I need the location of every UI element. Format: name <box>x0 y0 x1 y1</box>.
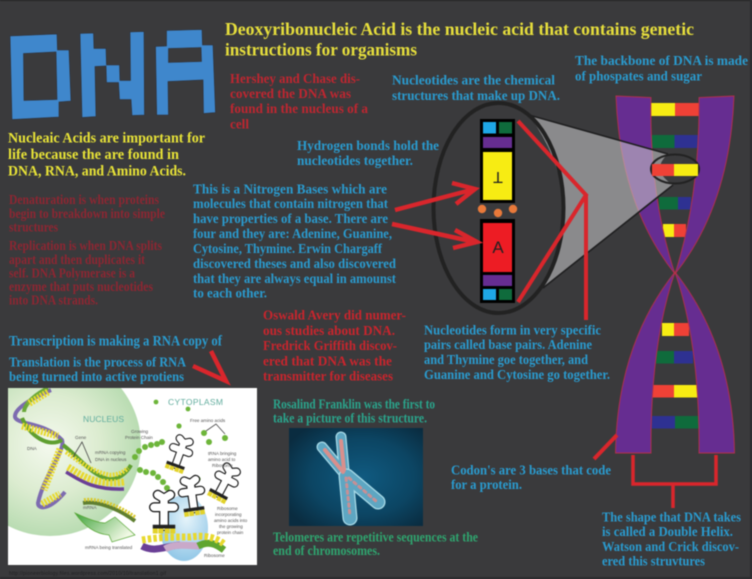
translation diagram picture <box>7 387 258 566</box>
diagram small labels: mRNA being translated <box>85 545 133 550</box>
diagram small labels: Free amino acids <box>190 418 226 423</box>
nucleotide A <box>480 219 515 303</box>
text: denaturation: Denaturation is when proteins <box>9 192 159 207</box>
text: nucleic acids importance <box>8 130 205 180</box>
text: Avery and Griffith <box>263 308 406 384</box>
text: backbone: of phospates and sugar <box>575 68 702 84</box>
text: translation <box>9 354 186 384</box>
text: codons: for a protein. <box>451 477 522 492</box>
diagram small labels: DNA in nucleus <box>95 457 127 462</box>
text: codons: Codon's are 3 bases that code <box>451 462 611 478</box>
text: telomeres: Telomeres are repetitive sequences at the <box>273 530 478 544</box>
text: codons <box>451 462 611 492</box>
text: Hershey and Chase: covered the DNA was <box>230 86 351 101</box>
diagram small labels: mRNA <box>83 505 97 510</box>
base pair rungs <box>650 103 700 428</box>
nucleotide T <box>480 119 515 203</box>
text: nitrogen bases: Cytosine, Thymine. Erwin Chargaff <box>193 241 382 256</box>
text: translation: being turned into active protiens <box>9 369 184 384</box>
text: replication: into DNA strands. <box>9 292 98 308</box>
text: base pairs: pairs called base pairs. Adenine <box>424 337 592 352</box>
text: replication: Replication is when DNA splits <box>9 238 162 253</box>
text: replication: enzyme that puts nucleotides <box>9 279 153 294</box>
ribosome <box>160 495 208 561</box>
text: replication: apart and then duplicates it <box>9 252 145 267</box>
text: translation: Translation is the process of RNA <box>9 354 186 370</box>
text: transcription: Transcription is making a RNA copy of <box>9 334 223 350</box>
text: nucleotides definition: Nucleotides are the chemical <box>392 72 555 88</box>
text: Hershey and Chase <box>230 71 368 132</box>
text: replication <box>9 238 162 308</box>
DNA ribbon <box>15 388 135 521</box>
text: Avery and Griffith: ous studies about DNA. <box>263 323 395 338</box>
arrow: transcription to picture <box>193 351 226 381</box>
sugar-phosphate backbone strands <box>616 96 734 453</box>
text: hydrogen bonds <box>297 138 439 168</box>
diagram small labels: Gene <box>75 435 87 440</box>
text: double helix <box>602 510 741 568</box>
tRNA molecules <box>165 437 194 474</box>
text: telomeres <box>273 530 478 558</box>
text: nucleotides definition <box>392 72 560 103</box>
diagram small labels: Protein Chain <box>125 435 153 440</box>
text: Rosalind Franklin: Rosalind Franklin was the first to <box>273 396 435 412</box>
nucleus <box>8 388 142 536</box>
text: nucleic acids importance: Nucleaic Acids are important for <box>8 130 205 146</box>
translation arrow <box>75 513 135 542</box>
text: nitrogen bases: discovered theses and also discovered <box>193 256 396 271</box>
diagram small labels: amino acid to <box>208 457 236 462</box>
nucleotide A: A <box>492 238 504 257</box>
text: double helix: The shape that DNA takes <box>602 510 741 524</box>
label: NUCLEUS: NUCLEUS <box>83 414 124 424</box>
text: base pairs: Guanine and Cytosine go together. <box>424 367 610 382</box>
title: instructions for organisms <box>225 40 417 60</box>
diagram small labels: the growing <box>219 524 243 529</box>
text: nucleotides definition: structures that make up DNA. <box>392 88 560 103</box>
text: Rosalind Franklin <box>273 396 435 426</box>
codon pointer line <box>594 435 617 459</box>
text: double helix: ered this struvtures <box>602 554 705 568</box>
diagram small labels <box>27 418 248 558</box>
image source url: http://pioneerbiology.files.wordpress.com/2010/10/translation1.gif <box>9 571 167 577</box>
diagram small labels: Growing <box>131 429 149 434</box>
text: backbone <box>575 53 748 84</box>
base pair connector lines <box>518 121 586 320</box>
text: denaturation: structures <box>9 220 58 234</box>
text: nitrogen bases <box>193 182 396 300</box>
text: Hershey and Chase: cell <box>230 116 249 132</box>
text: replication: self. DNA Polymerase is a <box>9 266 135 280</box>
text: nitrogen bases: that they are always equal in amounst <box>193 271 396 286</box>
diagram small labels: DNA <box>27 446 38 451</box>
amino acid chain <box>132 398 229 492</box>
text: denaturation: begin to breakdown into simple <box>9 206 165 221</box>
diagram small labels: protein chain <box>217 530 244 535</box>
small ellipse highlighting a base pair <box>651 154 699 184</box>
text: Rosalind Franklin: take a picture of this structure. <box>273 410 427 426</box>
text: nucleic acids importance: DNA, RNA, and Amino Acids. <box>8 164 186 180</box>
gene and amino acid callout lines <box>73 424 225 463</box>
text: hydrogen bonds: Hydrogen bonds hold the <box>297 138 439 153</box>
magnification cone <box>529 115 673 288</box>
text: nitrogen bases: molecules that contain nitrogen that <box>193 196 388 211</box>
ribosome mRNA band <box>142 536 224 550</box>
arrow: to adenine base <box>392 224 477 248</box>
text: nitrogen bases: have properties of a base. There are <box>193 211 388 226</box>
DNA block lettering logo <box>10 30 216 120</box>
text: nitrogen bases: to each other. <box>193 286 267 300</box>
text: double helix: Watson and Crick discov- <box>602 539 739 554</box>
text: nitrogen bases: four and they are: Adenine, Guanine, <box>193 226 392 241</box>
text: double helix: is called a Double Helix. <box>602 524 733 539</box>
text: base pairs: Nucleotides form in very specific <box>424 322 601 338</box>
text: base pairs: and Thymine goe together, and <box>424 352 588 367</box>
text: nitrogen bases: This is a Nitrogen Bases which are <box>193 182 387 196</box>
diagram small labels: Ribosome <box>212 463 233 468</box>
text: Hershey and Chase: Hershey and Chase dis- <box>230 71 360 86</box>
double helix diagram <box>616 96 734 453</box>
diagram small labels: mRNA copying <box>95 450 126 455</box>
diagram small labels: Ribosome <box>204 553 225 558</box>
text: Hershey and Chase: found in the nucleus of a <box>230 101 368 116</box>
large ellipse around nucleotide pair <box>434 103 564 313</box>
label: CYTOPLASM: CYTOPLASM <box>168 397 223 407</box>
text: Avery and Griffith: transmitter for diseases <box>263 368 393 384</box>
text: Avery and Griffith: Oswald Avery did numer- <box>263 308 406 322</box>
nucleotide T: T <box>493 168 503 185</box>
title: Deoxyribonucleic Acid is the nucleic acid that contains genetic <box>225 19 694 39</box>
double helix bracket <box>633 455 716 508</box>
arrow: to thymine base <box>395 183 475 210</box>
diagram small labels: tRNA bringing <box>208 451 237 456</box>
title <box>225 19 694 60</box>
text: telomeres: end of chromosomes. <box>273 543 380 558</box>
diagram small labels: Ribosome <box>217 506 238 511</box>
text: backbone: The backbone of DNA is made <box>575 53 748 68</box>
text: Avery and Griffith: ered that DNA was the <box>263 354 392 368</box>
text: hydrogen bonds: nucleotides together. <box>297 153 413 168</box>
diagram small labels: incorporating <box>215 512 242 517</box>
text: base pairs <box>424 322 610 382</box>
hydrogen bond dots <box>478 205 517 217</box>
chromosome photo <box>289 428 423 526</box>
text: denaturation <box>9 192 165 234</box>
diagram small labels: amino acids into <box>214 518 248 523</box>
text: nucleic acids importance: life because the are found in <box>8 147 180 163</box>
text: Avery and Griffith: Fredrick Griffith discov- <box>263 338 397 353</box>
